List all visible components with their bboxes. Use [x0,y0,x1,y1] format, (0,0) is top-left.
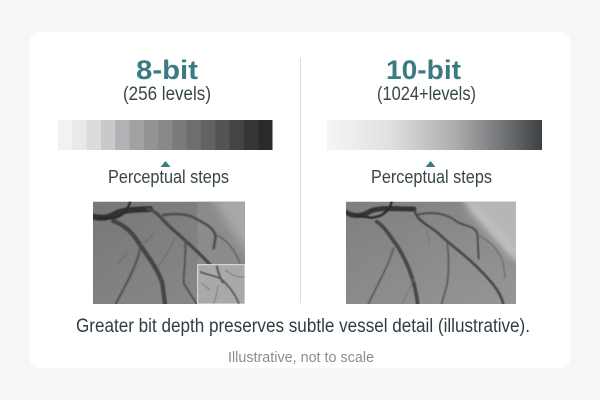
heading: 8-bit: 8-bit [136,55,198,85]
heading: 10-bit: 10-bit [386,55,461,85]
marker triangle [426,161,436,167]
label: perceptual steps: Perceptual steps [108,167,229,187]
subheading: 256 levels: (256 levels) [123,84,211,105]
infographic [30,32,570,368]
angiogram: 10-bit [346,202,516,304]
smooth gray bar [327,120,542,150]
marker triangle [160,161,170,167]
label: perceptual steps: Perceptual steps [371,167,492,187]
footnote: Illustrative, not to scale [228,349,374,366]
panel: 10-bit [327,55,542,304]
stepped gray bar [58,120,272,150]
divider [300,58,301,303]
caption: Greater bit depth preserves subtle vessel detail (illustrative). [76,316,530,337]
inset detail [198,265,245,304]
angiogram: 8-bit with inset [93,195,252,304]
panel: 8-bit [58,55,272,304]
subheading: 1024+ levels: (1024+levels) [377,84,476,105]
background card [30,32,570,368]
